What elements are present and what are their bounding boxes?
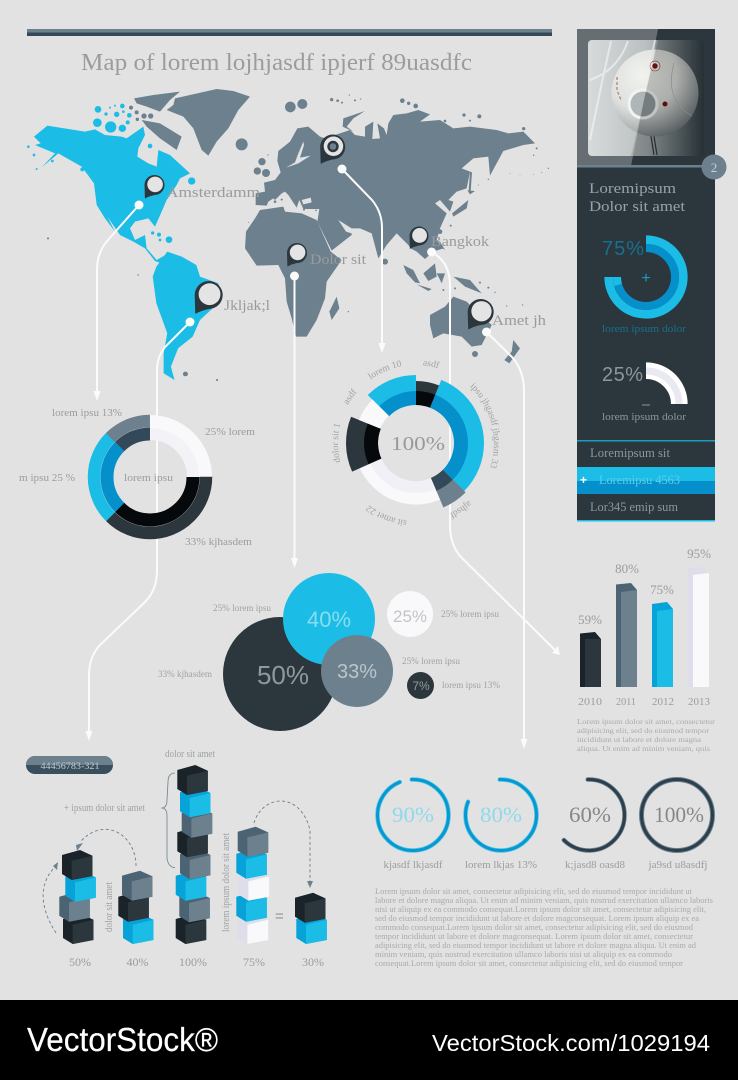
id pill: 44456783-321 — [40, 761, 100, 771]
bubble values — [257, 607, 430, 693]
cube stack 40% — [118, 871, 154, 944]
ring 60%: 60% — [569, 802, 611, 827]
ring 80% — [464, 778, 538, 871]
bar years — [578, 696, 710, 708]
panel donut 25%: 25% — [602, 364, 643, 386]
cube stacks chart — [26, 749, 327, 969]
panel donut 75%: 75% — [602, 238, 644, 260]
donut chart left — [19, 398, 255, 556]
right donut: curved labels: dolor sit 1 — [332, 424, 340, 462]
map: africa australia islands — [245, 207, 523, 363]
bar 2013 — [688, 567, 709, 687]
arrowheads and dots — [86, 164, 560, 749]
bubble labels: 25% lorem ipsu — [213, 603, 272, 613]
left donut: labels: lorem ipsu — [124, 472, 174, 484]
right donut: curved labels: ajhsdf — [450, 501, 471, 520]
panel photo: sphere — [577, 29, 704, 166]
cube labels: + ipsum dolor sit amet — [64, 803, 145, 814]
panel heading: Dolor sit amet — [589, 199, 686, 215]
bubble labels: lorem ipsu 13% — [442, 680, 501, 690]
bar chart text block: aliqua. Ut enim ad minim veniam, quis — [577, 744, 710, 753]
progress rings — [376, 778, 712, 871]
map labels: Dolor sit — [310, 252, 367, 268]
right donut: curved labels: ipsu jhgasdf jhgasm 33 — [470, 382, 500, 468]
bar 2010 — [580, 632, 601, 687]
bubble chart — [158, 573, 501, 731]
bar 2011 — [616, 583, 637, 687]
bar values: 95% — [687, 546, 711, 561]
ring 80%: lorem lkjas 13% — [465, 859, 537, 871]
line: dolor sit — [294, 276, 296, 560]
bubble values: 7% — [412, 679, 430, 693]
pin: amet — [468, 299, 494, 330]
panel list: + — [580, 473, 587, 487]
cube percent labels: 40% — [126, 955, 148, 969]
map labels: Amsterdamm — [166, 185, 260, 201]
bar 2012 — [652, 602, 673, 687]
ring 100% — [642, 780, 712, 871]
footer watermark band: VectorStock® — [27, 1021, 218, 1058]
bar years: 2010 — [578, 696, 603, 708]
cube labels: dolor sit amet — [104, 882, 115, 932]
map pins — [144, 134, 494, 330]
arrow: amsterdam line — [94, 391, 100, 401]
map labels: Jkljak;l — [224, 298, 270, 314]
panel donut 75%: lorem ipsum dolor — [602, 323, 686, 335]
bubble labels: 25% lorem ipsu — [441, 609, 500, 619]
panel heading: Loremipsum — [589, 181, 676, 197]
right donut: curved labels: lorem 10 — [367, 360, 401, 380]
bubble values: 40% — [307, 607, 351, 632]
panel list: Loremipsu 4563 — [599, 473, 680, 487]
cube percent labels: 30% — [302, 955, 324, 969]
bubble labels: 33% kjhasdem — [158, 669, 212, 679]
panel list: Lor345 emip sum — [590, 500, 678, 514]
cube labels: = — [275, 908, 284, 925]
left donut: labels: lorem ipsu 13% — [52, 407, 122, 419]
cube percent labels: 100% — [179, 955, 207, 969]
cube percent labels: 50% — [69, 955, 91, 969]
lower text block — [375, 887, 713, 968]
lower text block: minim veniam, quis nostrud exercitation ullamco laboris nisi ut aliquip ex ea commodo — [375, 950, 672, 959]
bar years: 2011 — [616, 696, 636, 708]
panel heading — [589, 181, 686, 215]
panel donut 75%: + — [641, 270, 651, 287]
panel list: Loremipsum sit — [590, 446, 671, 460]
left donut: segments — [71, 398, 229, 556]
bar years: 2013 — [688, 696, 710, 708]
bar values: 80% — [615, 561, 639, 576]
line: russia — [342, 169, 382, 346]
lower text block: sed do eiusmod tempor incididunt ut labore et dolore magconsequat. Lorem ipsum aliquip ex ea — [375, 914, 699, 923]
ring 90%: 90% — [392, 802, 434, 827]
ring 90% — [376, 778, 450, 871]
left donut: labels: m ipsu 25 % — [19, 472, 75, 484]
bubbles — [223, 573, 434, 731]
line: amsterdam — [97, 205, 139, 394]
right donut: curved labels: asdf — [423, 360, 440, 368]
ring 80%: 80% — [480, 802, 522, 827]
cube stack 50% — [59, 850, 96, 944]
panel donut 75% — [602, 238, 686, 335]
bar years: 2012 — [652, 696, 674, 708]
right donut: center value: 100% — [391, 433, 445, 455]
cube labels: dolor sit amet — [165, 749, 215, 760]
dashed arrows — [43, 801, 310, 933]
line: bangkok — [432, 252, 555, 650]
pin: russia — [320, 134, 345, 164]
arrowheads — [53, 843, 313, 888]
lower text block: consequat.Lorem ipsum dolor sit amet, consectetur adipisicing elit, sed do eiusmod tempor — [375, 959, 683, 968]
left donut: labels — [19, 407, 255, 548]
map labels: Bangkok — [431, 234, 490, 250]
panel list — [577, 440, 715, 522]
bubble values: 50% — [257, 660, 309, 690]
map: south america — [137, 252, 222, 381]
left donut: labels: 33% kjhasdem — [185, 536, 252, 548]
lower text block: adipisicing elit, sed do eiusmod tempor incididunt ut labore et dolore magna aliqua. Ut enim ad — [375, 941, 696, 950]
arrow: jkljak line — [86, 731, 92, 741]
bubble labels: 25% lorem ipsu — [402, 656, 461, 666]
left donut: labels: 25% lorem — [205, 426, 255, 438]
bubble labels — [158, 603, 501, 690]
donut chart right — [332, 360, 500, 526]
lower text block: nisi ut aliquip ex ea commodo consequat.Lorem ipsum dolor sit amet, consectetur adipisicing elit, — [375, 905, 706, 914]
bar chart text block — [577, 717, 715, 753]
bar values — [578, 546, 711, 627]
arrow: bangkok line — [552, 646, 560, 655]
map: north america and arctic — [27, 89, 250, 265]
white connector lines — [89, 169, 555, 742]
pin: bangkok — [410, 226, 428, 249]
lower text block: commodo consequat.Lorem ipsum dolor sit amet, consectetur adipisicing elit, sed do eiusmod — [375, 923, 693, 932]
pin: jkljak — [195, 281, 223, 314]
bar values: 59% — [578, 612, 602, 627]
arrow: dolor line — [291, 558, 298, 568]
lower text block: Lorem ipsum dolor sit amet, consectetur adipisicing elit, sed do eiusmod tempor incididunt ut — [375, 887, 693, 896]
ring 90%: kjasdf lkjasdf — [384, 859, 443, 871]
bar chart — [577, 546, 715, 753]
right donut: curved labels: sit amet 22 — [366, 506, 406, 526]
cube labels — [64, 749, 284, 932]
ring 100%: ja9sd u8asdfj — [647, 859, 708, 871]
bar chart text block: adipisicing elit, sed do eiusmod tempor — [577, 726, 709, 735]
line: amet — [486, 332, 524, 742]
footer watermark band: VectorStock.com/1029194 — [432, 1030, 710, 1056]
panel donut 25% — [602, 364, 686, 437]
brace — [162, 773, 175, 868]
map: eurasia — [254, 94, 549, 259]
world map — [27, 89, 549, 381]
ring 60%: k;jasd8 oasd8 — [565, 859, 625, 871]
bubble values: 25% — [393, 607, 427, 626]
id pill — [26, 756, 113, 774]
bubble values: 33% — [337, 661, 377, 683]
bar chart text block: incididunt ut labore et dolore magna — [577, 735, 702, 744]
panel donut 25%: lorem ipsum dolor — [602, 411, 686, 423]
lower text block: tempor incididunt ut labore et dolore magconsequat. Lorem ipsum dolor sit amet, consectetur — [375, 932, 693, 941]
ring 100%: 100% — [654, 802, 704, 827]
right donut: curved labels: asdf — [344, 388, 356, 404]
panel number badge — [577, 154, 726, 180]
bar chart text block: Lorem ipsum dolor sit amet, consectetur — [577, 717, 715, 726]
cube percent labels — [69, 955, 324, 969]
title: Map of lorem lojhjasdf ipjerf 89uasdfc — [81, 50, 472, 76]
cube stack 100% — [176, 765, 212, 944]
arrow: russia line — [378, 343, 386, 353]
right donut: curved labels — [332, 360, 500, 526]
cube stack 75% — [236, 827, 269, 944]
cube labels: lorem ipsum dolor sit amet — [221, 833, 232, 932]
pin: amsterdam — [144, 175, 164, 198]
pin: dolor — [287, 243, 307, 266]
panel number badge: 2 — [711, 160, 717, 175]
footer watermark band — [0, 1000, 738, 1080]
map labels: Amet jh — [492, 313, 547, 329]
lower text block: labore et dolore magna aliqua. Ut enim ad minim veniam, quis nostrud exercitation ullamco laboris — [375, 896, 713, 905]
bar values: 75% — [650, 582, 674, 597]
map labels — [166, 185, 547, 329]
ring 60% — [552, 778, 626, 871]
arrow: amet line — [520, 739, 528, 749]
top header bar — [27, 29, 552, 36]
line: jkljak — [89, 322, 190, 734]
cube percent labels: 75% — [243, 955, 265, 969]
panel: sidebar — [577, 29, 726, 522]
cube stack 30% — [295, 893, 327, 944]
right donut: segments — [340, 367, 492, 519]
